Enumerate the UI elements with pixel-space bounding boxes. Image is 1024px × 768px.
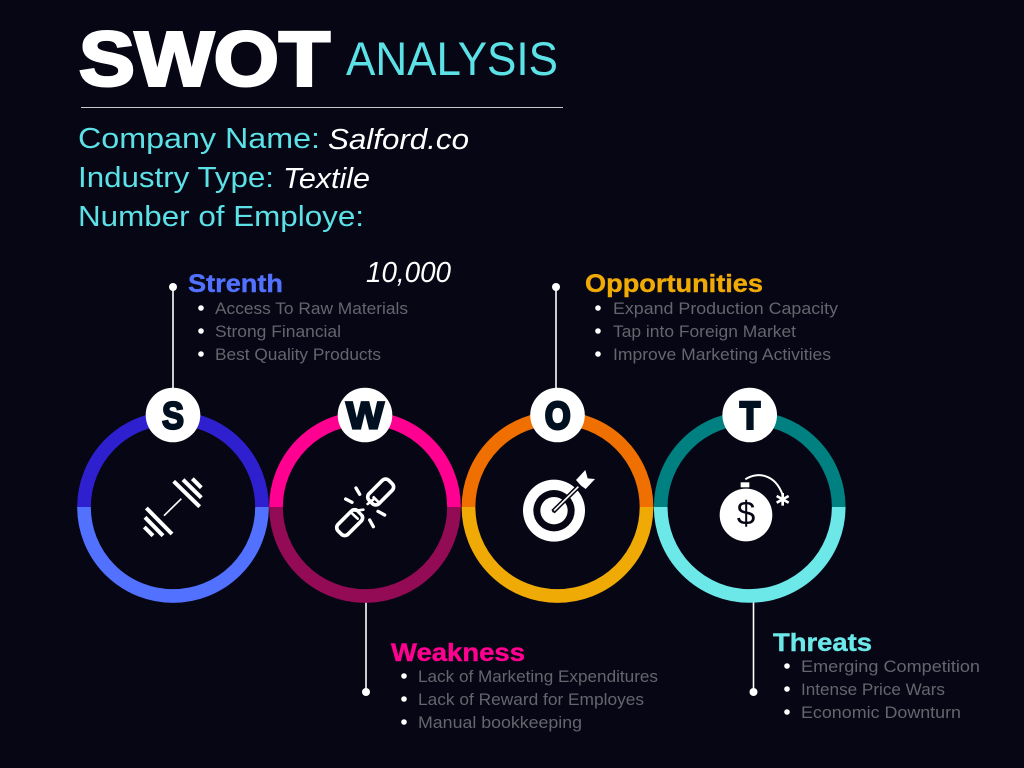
company info block: Salford.co <box>328 124 469 156</box>
panel: strength text <box>169 270 408 392</box>
ring: W: W <box>346 396 384 438</box>
company info block: Company Name: <box>78 123 320 155</box>
panel: strength text: Strong Financial <box>215 322 341 341</box>
panel: opportunities text: Opportunities <box>585 270 763 298</box>
panel: threats text: Threats <box>773 629 872 657</box>
icon: target with arrow <box>523 470 595 542</box>
title <box>79 16 558 102</box>
icon: barbell <box>144 479 201 536</box>
panel: threats text <box>750 600 980 722</box>
panel: weakness text <box>362 600 658 732</box>
panel: weakness text: Lack of Reward for Employes <box>418 690 644 709</box>
panel: threats text: Emerging Competition <box>801 657 980 676</box>
panel: opportunities text: Tap into Foreign Market <box>613 322 796 341</box>
ring: W <box>276 388 454 596</box>
panel: weakness text: Weakness <box>391 639 525 667</box>
panel: weakness text: Lack of Marketing Expenditures <box>418 667 658 686</box>
company info block: Number of Employe: <box>78 201 364 233</box>
panel: strength text: Best Quality Products <box>215 345 381 364</box>
ring: S <box>84 388 262 596</box>
ring: O: O <box>545 396 570 438</box>
company info block <box>78 123 469 289</box>
company info block: Textile <box>283 163 370 195</box>
panel: threats text: Intense Price Wars <box>801 680 945 699</box>
panel: strength text: Strenth <box>188 270 283 298</box>
icon: broken chain <box>335 477 396 538</box>
company info block: Industry Type: <box>78 162 274 194</box>
panel: opportunities text: Improve Marketing Activities <box>613 345 831 364</box>
icon: dollar bomb: $ <box>737 496 755 533</box>
icon: dollar bomb <box>720 475 789 541</box>
ring: O <box>468 388 646 596</box>
panel: weakness text: Manual bookkeeping <box>418 713 582 732</box>
title: ANALYSIS <box>346 32 558 85</box>
panel: strength text: Access To Raw Materials <box>215 299 408 318</box>
title: SWOT <box>79 16 330 102</box>
ring: S: S <box>162 396 184 438</box>
ring: T: T <box>740 396 760 438</box>
panel: threats text: Economic Downturn <box>801 703 961 722</box>
company info block: 10,000 <box>366 257 451 289</box>
panel: opportunities text: Expand Production Capacity <box>613 299 839 318</box>
panel: opportunities text <box>552 270 839 392</box>
ring: T <box>661 388 839 596</box>
